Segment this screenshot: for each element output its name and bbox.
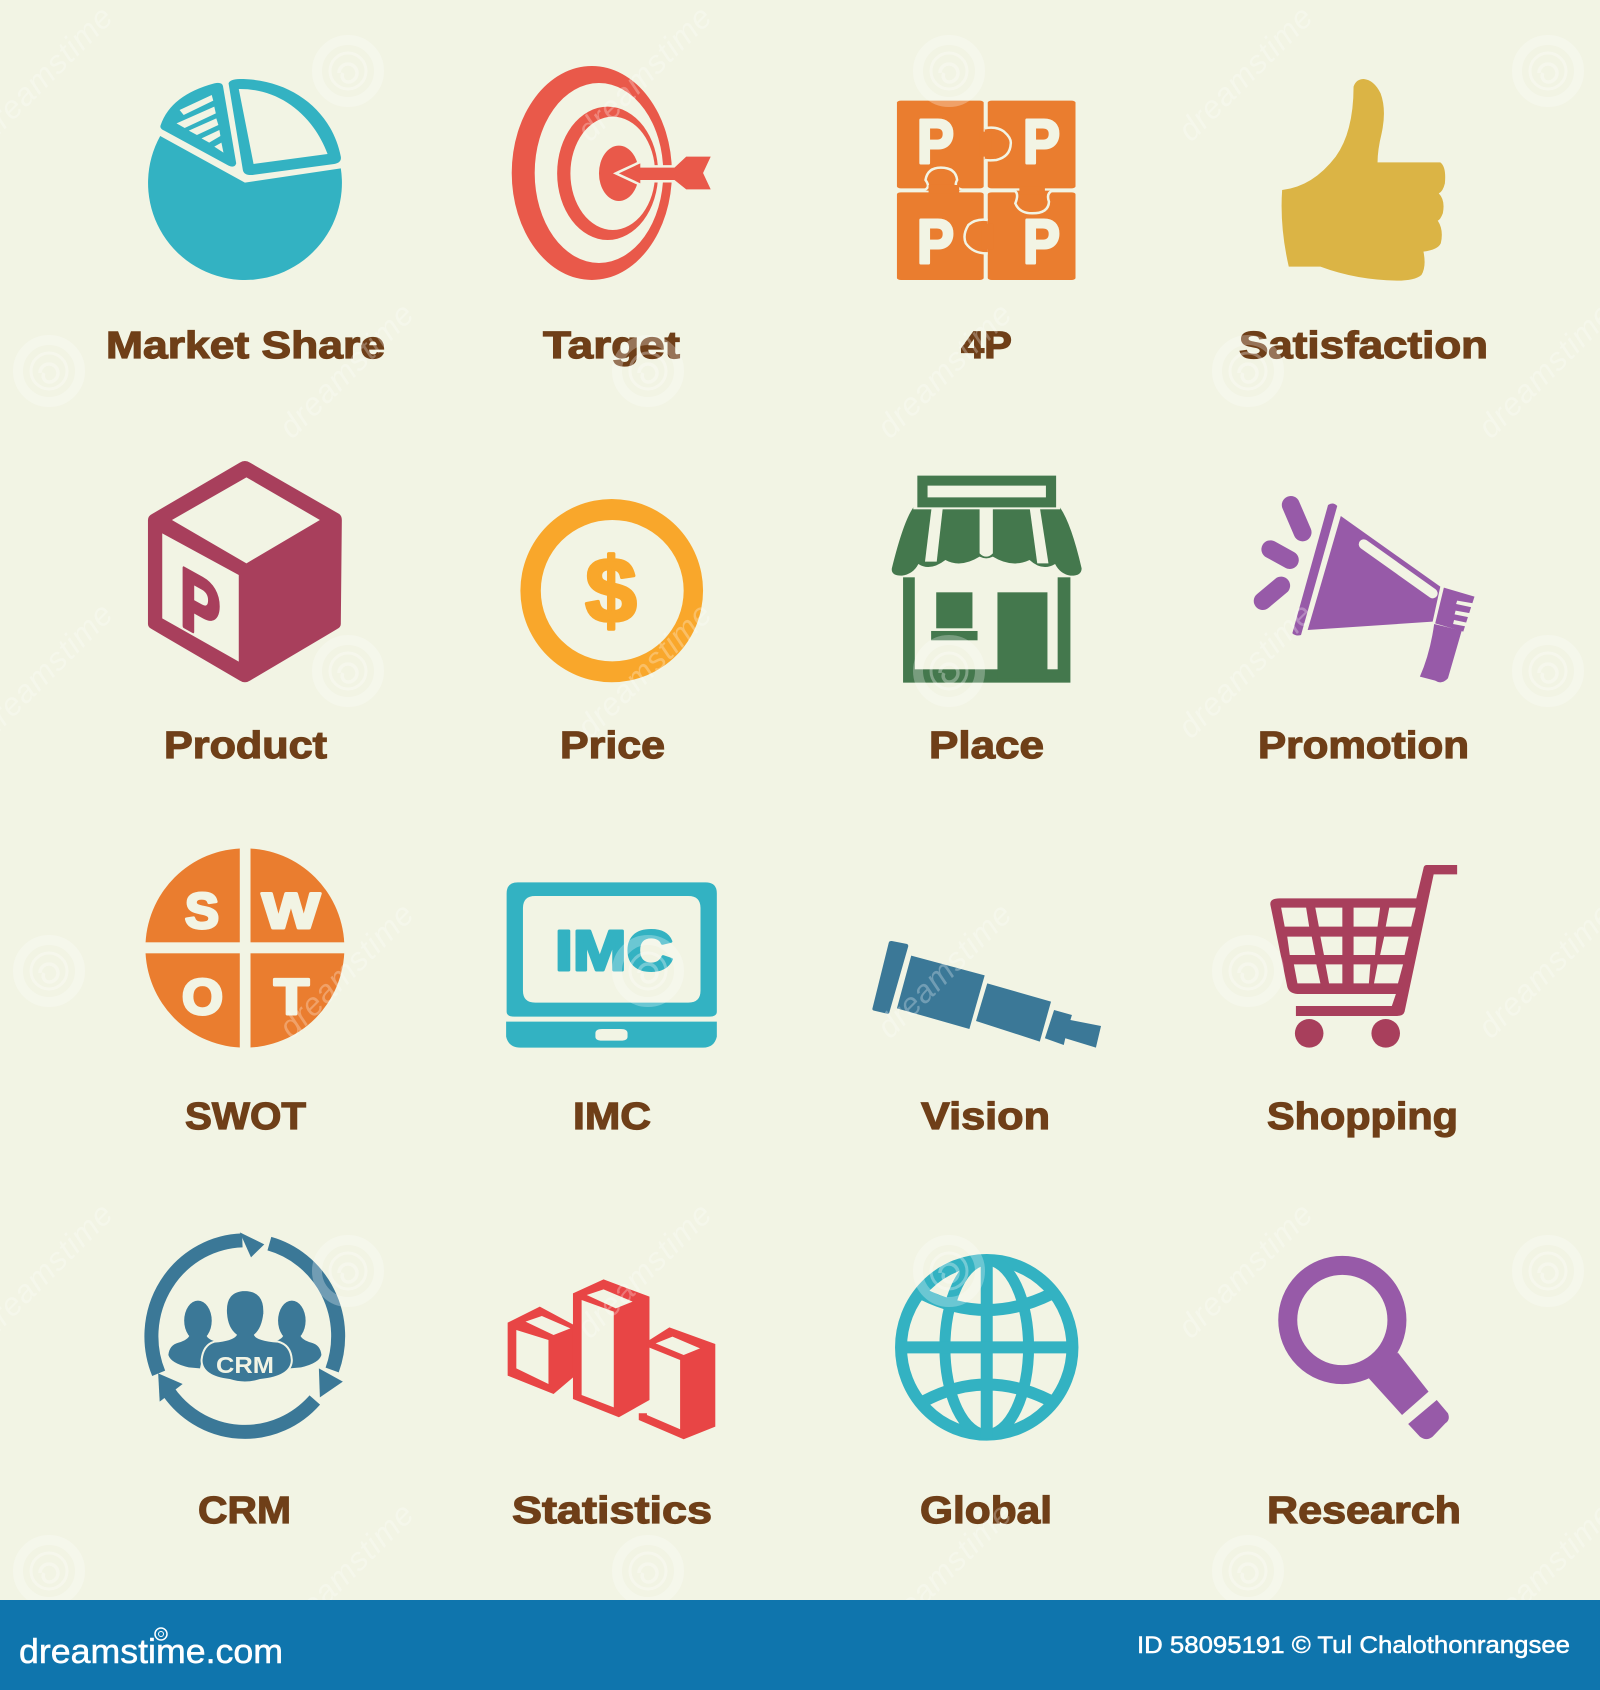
icon: 3D bars [508,1279,715,1439]
watermark text: dreamstime [569,1196,719,1345]
label: Market Share: Market Share [106,325,385,367]
label: Place: Place [929,725,1044,767]
panel: place [892,473,1082,767]
watermark text: dreamstime [271,296,421,445]
watermark text: dreamstime [1170,1196,1320,1345]
icon: SWOT circle [138,843,352,1053]
icon: megaphone [1263,504,1474,682]
watermark text: dreamstime [869,296,1019,445]
icon: shopping cart [1270,865,1457,1048]
image id and credit: ID 58095191 © Tul Chalothonrangsee [1137,1632,1570,1659]
icon: target with arrow [512,66,711,280]
icon: coin [520,499,703,682]
label: Shopping: Shopping [1267,1096,1458,1138]
label: Promotion: Promotion [1258,725,1469,767]
label: Target: Target [543,325,680,367]
panel: vision [872,941,1101,1138]
footer banner [0,1600,1600,1690]
icon: telescope [872,941,1101,1048]
logo: dreamstime.com: dreamstime.com [19,1633,283,1671]
icon: laptop: IMC [555,919,673,983]
label: Price: Price [560,725,665,767]
icon: puzzle: P [1023,108,1060,177]
icon: coin: $ [585,540,637,642]
label: Satisfaction: Satisfaction [1239,325,1488,367]
panel: 4P [897,101,1076,367]
icon: SWOT circle: O [182,969,223,1025]
icon: SWOT circle: T [274,969,309,1025]
icon: storefront [892,473,1082,683]
panel: promotion [1258,504,1474,767]
label: Vision: Vision [921,1096,1050,1138]
label: Research: Research [1267,1490,1461,1532]
panel: satisfaction [1239,79,1488,367]
icon: pie chart [148,79,342,280]
icon: globe [899,1257,1076,1438]
label: Statistics: Statistics [512,1490,712,1532]
panel: CRM [151,1232,343,1532]
icon: CRM cycle with people [151,1232,343,1432]
watermark text: dreamstime [271,1496,421,1645]
icon: SWOT circle: W [262,883,321,939]
panel: global [899,1257,1076,1532]
panel: market share [106,79,385,367]
icon: box [148,461,342,682]
panel: price [520,499,703,767]
icon: puzzle: P [917,208,954,277]
icon: magnifying glass [1288,1265,1449,1439]
label: SWOT: SWOT [185,1096,306,1138]
watermark text: dreamstime [569,596,719,745]
icon: SWOT circle: S [185,883,219,939]
label: 4P: 4P [961,325,1012,367]
icon: laptop [506,882,717,1048]
label: Product: Product [164,725,327,767]
watermark text: dreamstime [1170,596,1320,745]
label: IMC: IMC [573,1096,651,1138]
icon: puzzle [897,101,1076,280]
panel: shopping [1267,865,1458,1138]
panel: target [512,66,711,367]
label: CRM: CRM [198,1490,291,1532]
icon: puzzle: P [1023,208,1060,277]
panel: statistics [508,1279,715,1532]
watermark text: dreamstime [1170,0,1320,148]
watermark text: dreamstime [869,1496,1019,1645]
panel: SWOT [138,843,352,1138]
watermark text: dreamstime [869,896,1019,1045]
icon: puzzle: P [917,108,954,177]
panel: research [1267,1265,1461,1532]
watermark text: dreamstime [271,896,421,1045]
label: Global: Global [920,1490,1052,1532]
panel: IMC [506,882,717,1138]
watermark text: dreamstime [569,0,719,148]
icon: CRM cycle with people: CRM [216,1352,274,1378]
icon: thumbs up [1282,79,1445,281]
icon: box: P [180,549,220,665]
panel: product [148,461,342,767]
